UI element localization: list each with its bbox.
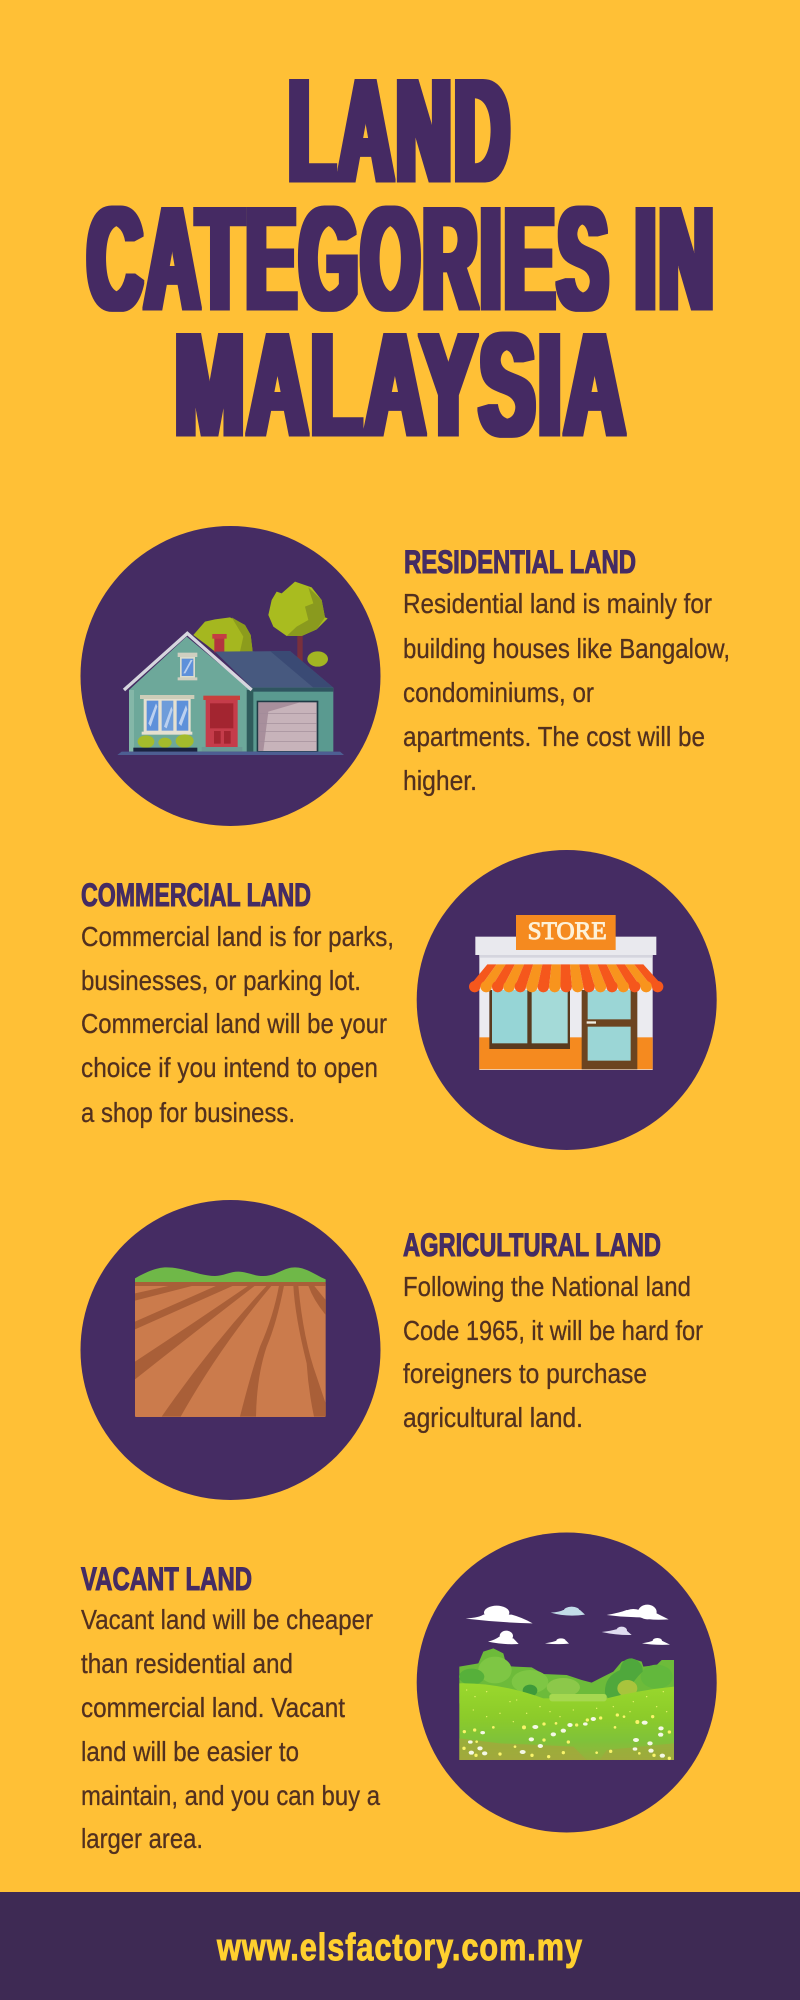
heading: agricultural land: AGRICULTURAL LAND xyxy=(403,1227,661,1263)
text block: vacant land: commercial land. Vacant xyxy=(81,1692,345,1723)
text block: vacant land: larger area. xyxy=(81,1823,203,1854)
text block: vacant land: Vacant land will be cheaper xyxy=(81,1604,373,1635)
text block: residential land: condominiums, or xyxy=(403,677,594,708)
title: LAND xyxy=(288,49,512,212)
text block: commercial land: Commercial land will be your xyxy=(81,1008,387,1039)
text block: vacant land: land will be easier to xyxy=(81,1736,299,1767)
text block: agricultural land xyxy=(403,1271,703,1433)
panel: agricultural land xyxy=(80,1200,703,1500)
footer band xyxy=(0,1892,800,2000)
text block: residential land xyxy=(403,588,730,796)
text block: vacant land xyxy=(81,1604,380,1854)
heading: commercial land: COMMERCIAL LAND xyxy=(81,877,311,913)
text block: commercial land: a shop for business. xyxy=(81,1097,295,1128)
text block: commercial land: Commercial land is for parks, xyxy=(81,921,394,952)
heading: residential land: RESIDENTIAL LAND xyxy=(404,544,636,580)
icon: ploughed field in circle xyxy=(80,1200,380,1500)
panel: commercial land xyxy=(81,850,717,1150)
text block: agricultural land: Following the National land xyxy=(403,1271,691,1302)
icon: store in circle: STORE xyxy=(528,917,607,945)
text block: agricultural land: agricultural land. xyxy=(403,1402,583,1433)
icon: store in circle xyxy=(417,850,717,1150)
title xyxy=(88,49,717,466)
text block: residential land: apartments. The cost will be xyxy=(403,721,705,752)
text block: residential land: higher. xyxy=(403,765,477,796)
text block: commercial land: choice if you intend to open xyxy=(81,1052,378,1083)
text block: commercial land: businesses, or parking lot. xyxy=(81,965,361,996)
text block: vacant land: maintain, and you can buy a xyxy=(81,1780,380,1811)
panel: vacant land xyxy=(81,1532,717,1854)
text block: residential land: Residential land is mainly for xyxy=(403,588,712,619)
text block: commercial land xyxy=(81,921,394,1128)
icon: meadow in circle xyxy=(417,1532,717,1832)
text block: agricultural land: foreigners to purchase xyxy=(403,1358,647,1389)
text block: vacant land: than residential and xyxy=(81,1648,293,1679)
panel: residential land xyxy=(80,526,730,826)
icon: house in circle xyxy=(80,526,380,826)
footer website url: www.elsfactory.com.my xyxy=(216,1927,583,1969)
heading: vacant land: VACANT LAND xyxy=(81,1561,252,1597)
text block: agricultural land: Code 1965, it will be hard for xyxy=(403,1315,703,1346)
text block: residential land: building houses like Bangalow, xyxy=(403,633,730,664)
